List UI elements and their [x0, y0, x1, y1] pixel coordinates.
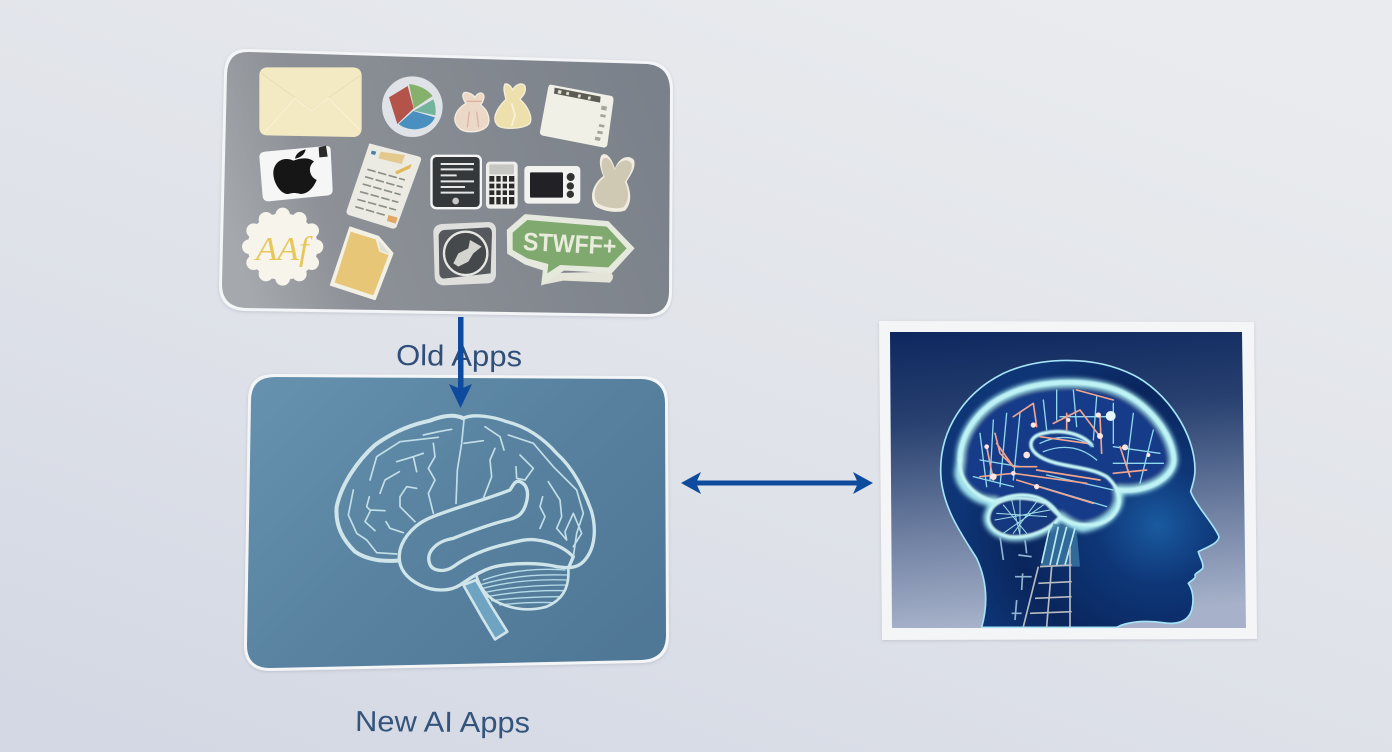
icon: dark tool badge	[433, 222, 496, 285]
neuron sparks	[984, 411, 1150, 489]
icon: STWFF speech tag	[507, 215, 634, 285]
icon: cream bunny bag	[495, 84, 531, 128]
icon: apple card	[259, 146, 333, 201]
icon: scalloped badge: AAf	[254, 231, 314, 268]
icon: brain outline	[336, 416, 594, 639]
app stickers	[242, 67, 635, 299]
icon: pie chart	[382, 76, 443, 137]
icon: STWFF speech tag: STWFF+	[522, 228, 617, 261]
icon: pink bunny bag	[455, 92, 489, 132]
label: new ai apps: New AI Apps	[355, 706, 530, 740]
arrow: double-headed link	[681, 472, 873, 494]
icon: scalloped badge	[242, 208, 323, 286]
icon: envelope	[259, 67, 362, 137]
photo: glowing ai brain in head	[879, 321, 1257, 640]
panel: new ai apps	[244, 374, 669, 671]
glowing spine	[1000, 523, 1080, 627]
panel: old apps	[219, 49, 673, 317]
icon: tablet	[430, 155, 482, 209]
icon: calculator	[486, 162, 518, 209]
icon: beige bunny	[592, 154, 635, 212]
arrow: old apps to new ai apps	[449, 317, 472, 408]
icon: browser window	[540, 85, 613, 148]
head silhouette	[941, 360, 1219, 627]
glowing brain	[958, 382, 1174, 537]
label: old apps: Old Apps	[396, 340, 522, 373]
icon: clipboard checklist	[347, 143, 421, 229]
icon: yellow document	[331, 227, 393, 299]
icon: small screen device	[524, 166, 580, 204]
